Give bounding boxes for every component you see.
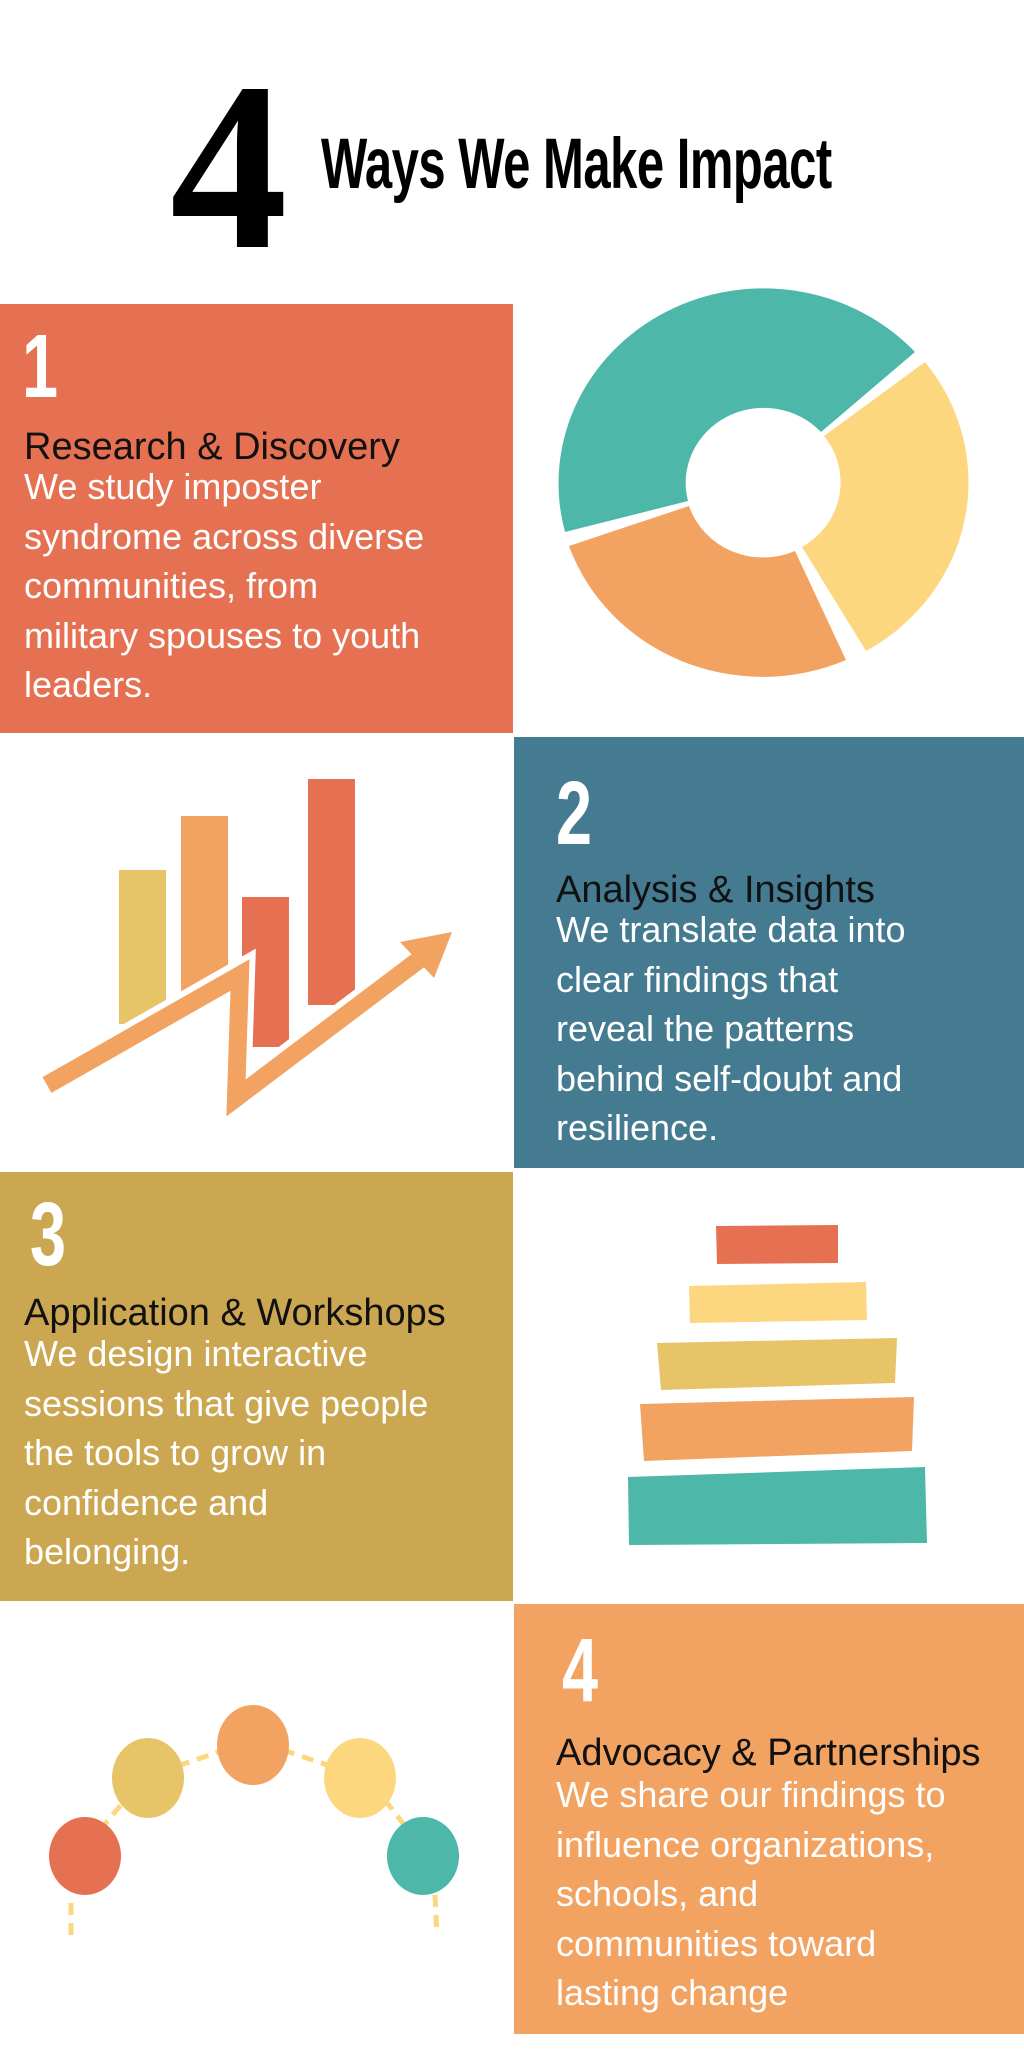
panel 2: analysis bbox=[514, 737, 1024, 1168]
body: influence organizations, bbox=[556, 1824, 934, 1865]
heading: Application & Workshops bbox=[24, 1292, 446, 1334]
body: belonging. bbox=[24, 1531, 190, 1572]
body: We design interactive bbox=[24, 1333, 368, 1374]
teal segment bbox=[559, 288, 915, 532]
cycle graphic bbox=[558, 288, 968, 677]
body bbox=[24, 1333, 428, 1572]
body: military spouses to youth bbox=[24, 615, 420, 656]
body: sessions that give people bbox=[24, 1383, 428, 1424]
body: We translate data into bbox=[556, 909, 906, 950]
number 2: 2 bbox=[556, 764, 592, 864]
circles arc bbox=[49, 1705, 459, 1935]
heading: Analysis & Insights bbox=[556, 869, 875, 911]
number 4: 4 bbox=[562, 1621, 598, 1721]
bar chart with arrow bbox=[42, 779, 452, 1116]
body bbox=[556, 1774, 946, 2013]
body: resilience. bbox=[556, 1107, 718, 1148]
title bbox=[170, 33, 832, 299]
heading: Research & Discovery bbox=[24, 426, 400, 468]
body: reveal the patterns bbox=[556, 1008, 854, 1049]
circles bbox=[49, 1705, 459, 1895]
body: communities, from bbox=[24, 565, 318, 606]
orange segment bbox=[569, 506, 846, 677]
arrow bbox=[47, 932, 452, 1098]
heading: Advocacy & Partnerships bbox=[556, 1732, 981, 1774]
body: schools, and bbox=[556, 1873, 758, 1914]
body: behind self-doubt and bbox=[556, 1058, 902, 1099]
dashed connectors bbox=[71, 1750, 437, 1935]
body: confidence and bbox=[24, 1482, 268, 1523]
panel 4: advocacy bbox=[514, 1604, 1024, 2034]
body bbox=[24, 466, 424, 705]
panel 3: application bbox=[0, 1172, 513, 1601]
yellow segment bbox=[802, 362, 969, 651]
title text: Ways We Make Impact bbox=[321, 126, 832, 204]
number 3: 3 bbox=[30, 1185, 66, 1285]
body: clear findings that bbox=[556, 959, 838, 1000]
body: We share our findings to bbox=[556, 1774, 946, 1815]
number 1: 1 bbox=[22, 317, 58, 417]
body: communities toward bbox=[556, 1923, 876, 1964]
body: syndrome across diverse bbox=[24, 516, 424, 557]
body bbox=[556, 909, 906, 1148]
big number 4: 4 bbox=[170, 33, 288, 299]
panel 1: research bbox=[0, 304, 513, 733]
body: the tools to grow in bbox=[24, 1432, 326, 1473]
body: leaders. bbox=[24, 664, 152, 705]
body: lasting change bbox=[556, 1972, 788, 2013]
body: We study imposter bbox=[24, 466, 321, 507]
stacked pyramid bbox=[628, 1225, 927, 1545]
bars bbox=[119, 779, 355, 1047]
